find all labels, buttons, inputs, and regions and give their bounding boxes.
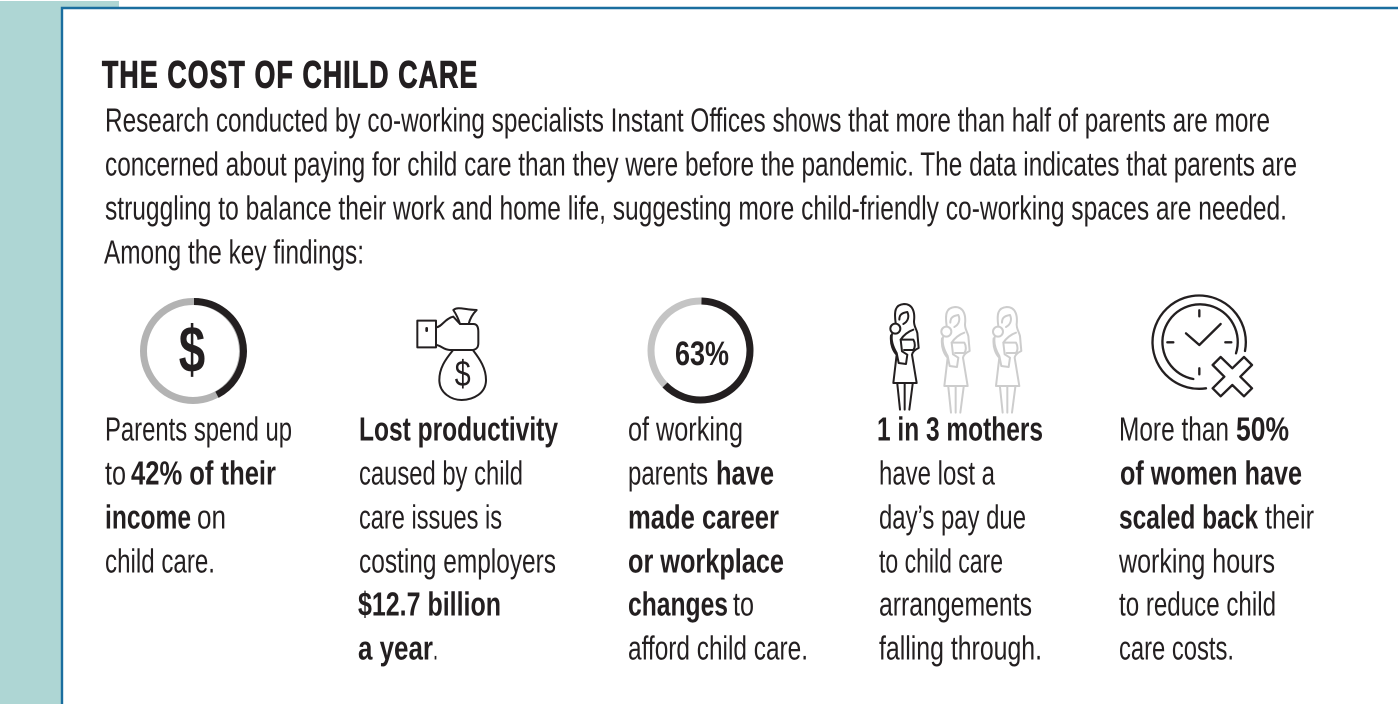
finding: women scaled back hours	[1118, 412, 1314, 668]
finding: women scaled back hours: to reduce child	[1119, 586, 1276, 624]
icon: hand holding money bag: $	[455, 353, 471, 394]
icon: dollar ring 42%	[144, 302, 243, 400]
icon: hand holding money bag	[417, 308, 486, 400]
finding: income share: on	[197, 500, 226, 536]
finding: women scaled back hours: their	[1265, 500, 1314, 536]
finding: lost productivity: $12.7 billion	[358, 586, 501, 624]
finding: 1 in 3 mothers: to child care	[879, 544, 1003, 580]
finding: income share: Parents spend up	[105, 412, 292, 448]
finding: women scaled back hours: of women have	[1120, 456, 1302, 492]
finding: 63% career changes: made career	[628, 500, 779, 536]
intro paragraph	[104, 102, 1297, 272]
finding: women scaled back hours: 50%	[1236, 412, 1289, 448]
finding: lost productivity: .	[433, 630, 438, 668]
teal side band	[0, 1, 119, 704]
finding: income share: child care.	[105, 544, 215, 580]
finding: lost productivity: costing employers	[359, 544, 556, 580]
icon: three mothers holding babies	[890, 304, 1021, 413]
finding: 63% career changes: have	[716, 456, 774, 492]
finding: 1 in 3 mothers: day’s pay due	[879, 500, 1026, 536]
finding: 63% career changes: afford child care.	[628, 630, 808, 668]
finding: 1 in 3 mothers	[877, 412, 1043, 668]
title: THE COST OF CHILD CARE	[102, 54, 477, 96]
finding: women scaled back hours: scaled back	[1119, 500, 1258, 536]
finding: women scaled back hours: care costs.	[1119, 630, 1234, 668]
finding: 1 in 3 mothers: have lost a	[879, 456, 995, 492]
finding: 1 in 3 mothers: falling through.	[879, 630, 1042, 668]
finding: income share	[105, 412, 292, 580]
finding: income share: income	[105, 500, 191, 536]
finding: 63% career changes: to	[733, 586, 754, 624]
finding: women scaled back hours: More than	[1119, 412, 1229, 448]
finding: 63% career changes: or workplace	[628, 544, 784, 580]
icon: dollar ring 42%: $	[179, 312, 205, 386]
finding: 1 in 3 mothers: arrangements	[879, 586, 1032, 624]
finding: lost productivity: caused by child	[359, 456, 523, 492]
finding: lost productivity: Lost productivity	[359, 412, 558, 448]
intro paragraph: Among the key findings:	[104, 234, 364, 272]
finding: lost productivity: care issues is	[359, 500, 502, 536]
finding: 63% career changes: parents	[628, 456, 708, 492]
icon: 63% ring	[651, 301, 750, 400]
finding: income share: to	[105, 456, 126, 492]
finding: 1 in 3 mothers: 1 in 3 mothers	[877, 412, 1043, 448]
icon: 63% ring: 63%	[675, 335, 729, 373]
finding: 63% career changes: changes	[628, 586, 728, 624]
finding: lost productivity	[358, 412, 558, 668]
finding: women scaled back hours: working hours	[1118, 544, 1275, 580]
finding: 63% career changes: of working	[628, 412, 743, 448]
finding: income share: 42% of their	[131, 456, 276, 492]
finding: 63% career changes	[628, 412, 808, 668]
finding: lost productivity: a year	[358, 630, 433, 668]
icon: clock with cross	[1153, 296, 1252, 396]
